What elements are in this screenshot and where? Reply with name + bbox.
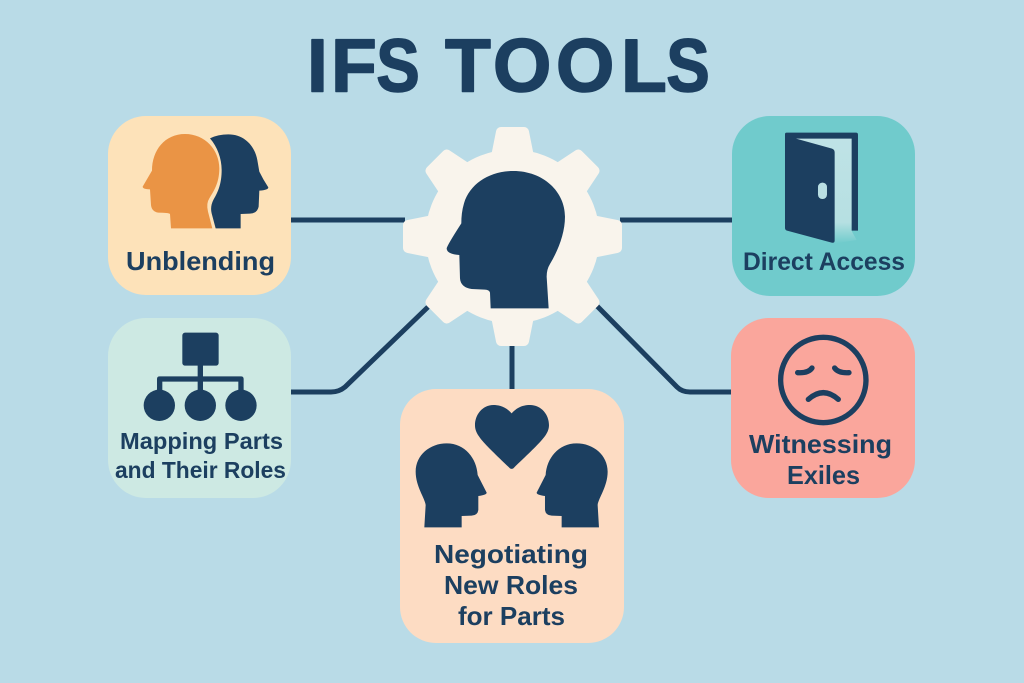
label: for Parts — [458, 601, 565, 631]
icon: open door — [785, 133, 858, 243]
panel: witnessing exiles — [731, 318, 915, 498]
icon: two overlapping heads — [143, 134, 268, 228]
panel: unblending — [108, 116, 291, 295]
title: F — [331, 24, 377, 108]
label: Witnessing — [749, 429, 892, 459]
title: S — [376, 23, 420, 108]
icon: central head — [447, 171, 565, 308]
label: Direct Access — [743, 248, 905, 276]
title: L — [621, 24, 667, 108]
label — [749, 429, 892, 490]
label: Negotiating — [434, 539, 588, 569]
title: O — [556, 24, 614, 108]
label: and Their Roles — [115, 457, 286, 483]
icon: two heads and heart — [416, 405, 608, 527]
title: S — [666, 23, 710, 108]
title — [307, 23, 710, 108]
title: I — [307, 24, 328, 108]
panel: mapping parts — [108, 318, 291, 498]
label: Mapping Parts — [120, 428, 283, 454]
label: New Roles — [444, 570, 578, 600]
title: T — [445, 24, 491, 108]
icon: hierarchy — [144, 333, 257, 421]
panel: direct access — [732, 116, 915, 296]
title: O — [493, 24, 551, 108]
central gear with head — [408, 132, 617, 341]
label — [434, 539, 588, 631]
panel: negotiating new roles — [400, 389, 624, 643]
gear — [408, 132, 617, 341]
label — [115, 428, 286, 483]
icon: sad face — [781, 337, 866, 423]
label: Exiles — [787, 460, 860, 490]
connectors — [291, 220, 732, 392]
label: Unblending — [126, 246, 275, 276]
